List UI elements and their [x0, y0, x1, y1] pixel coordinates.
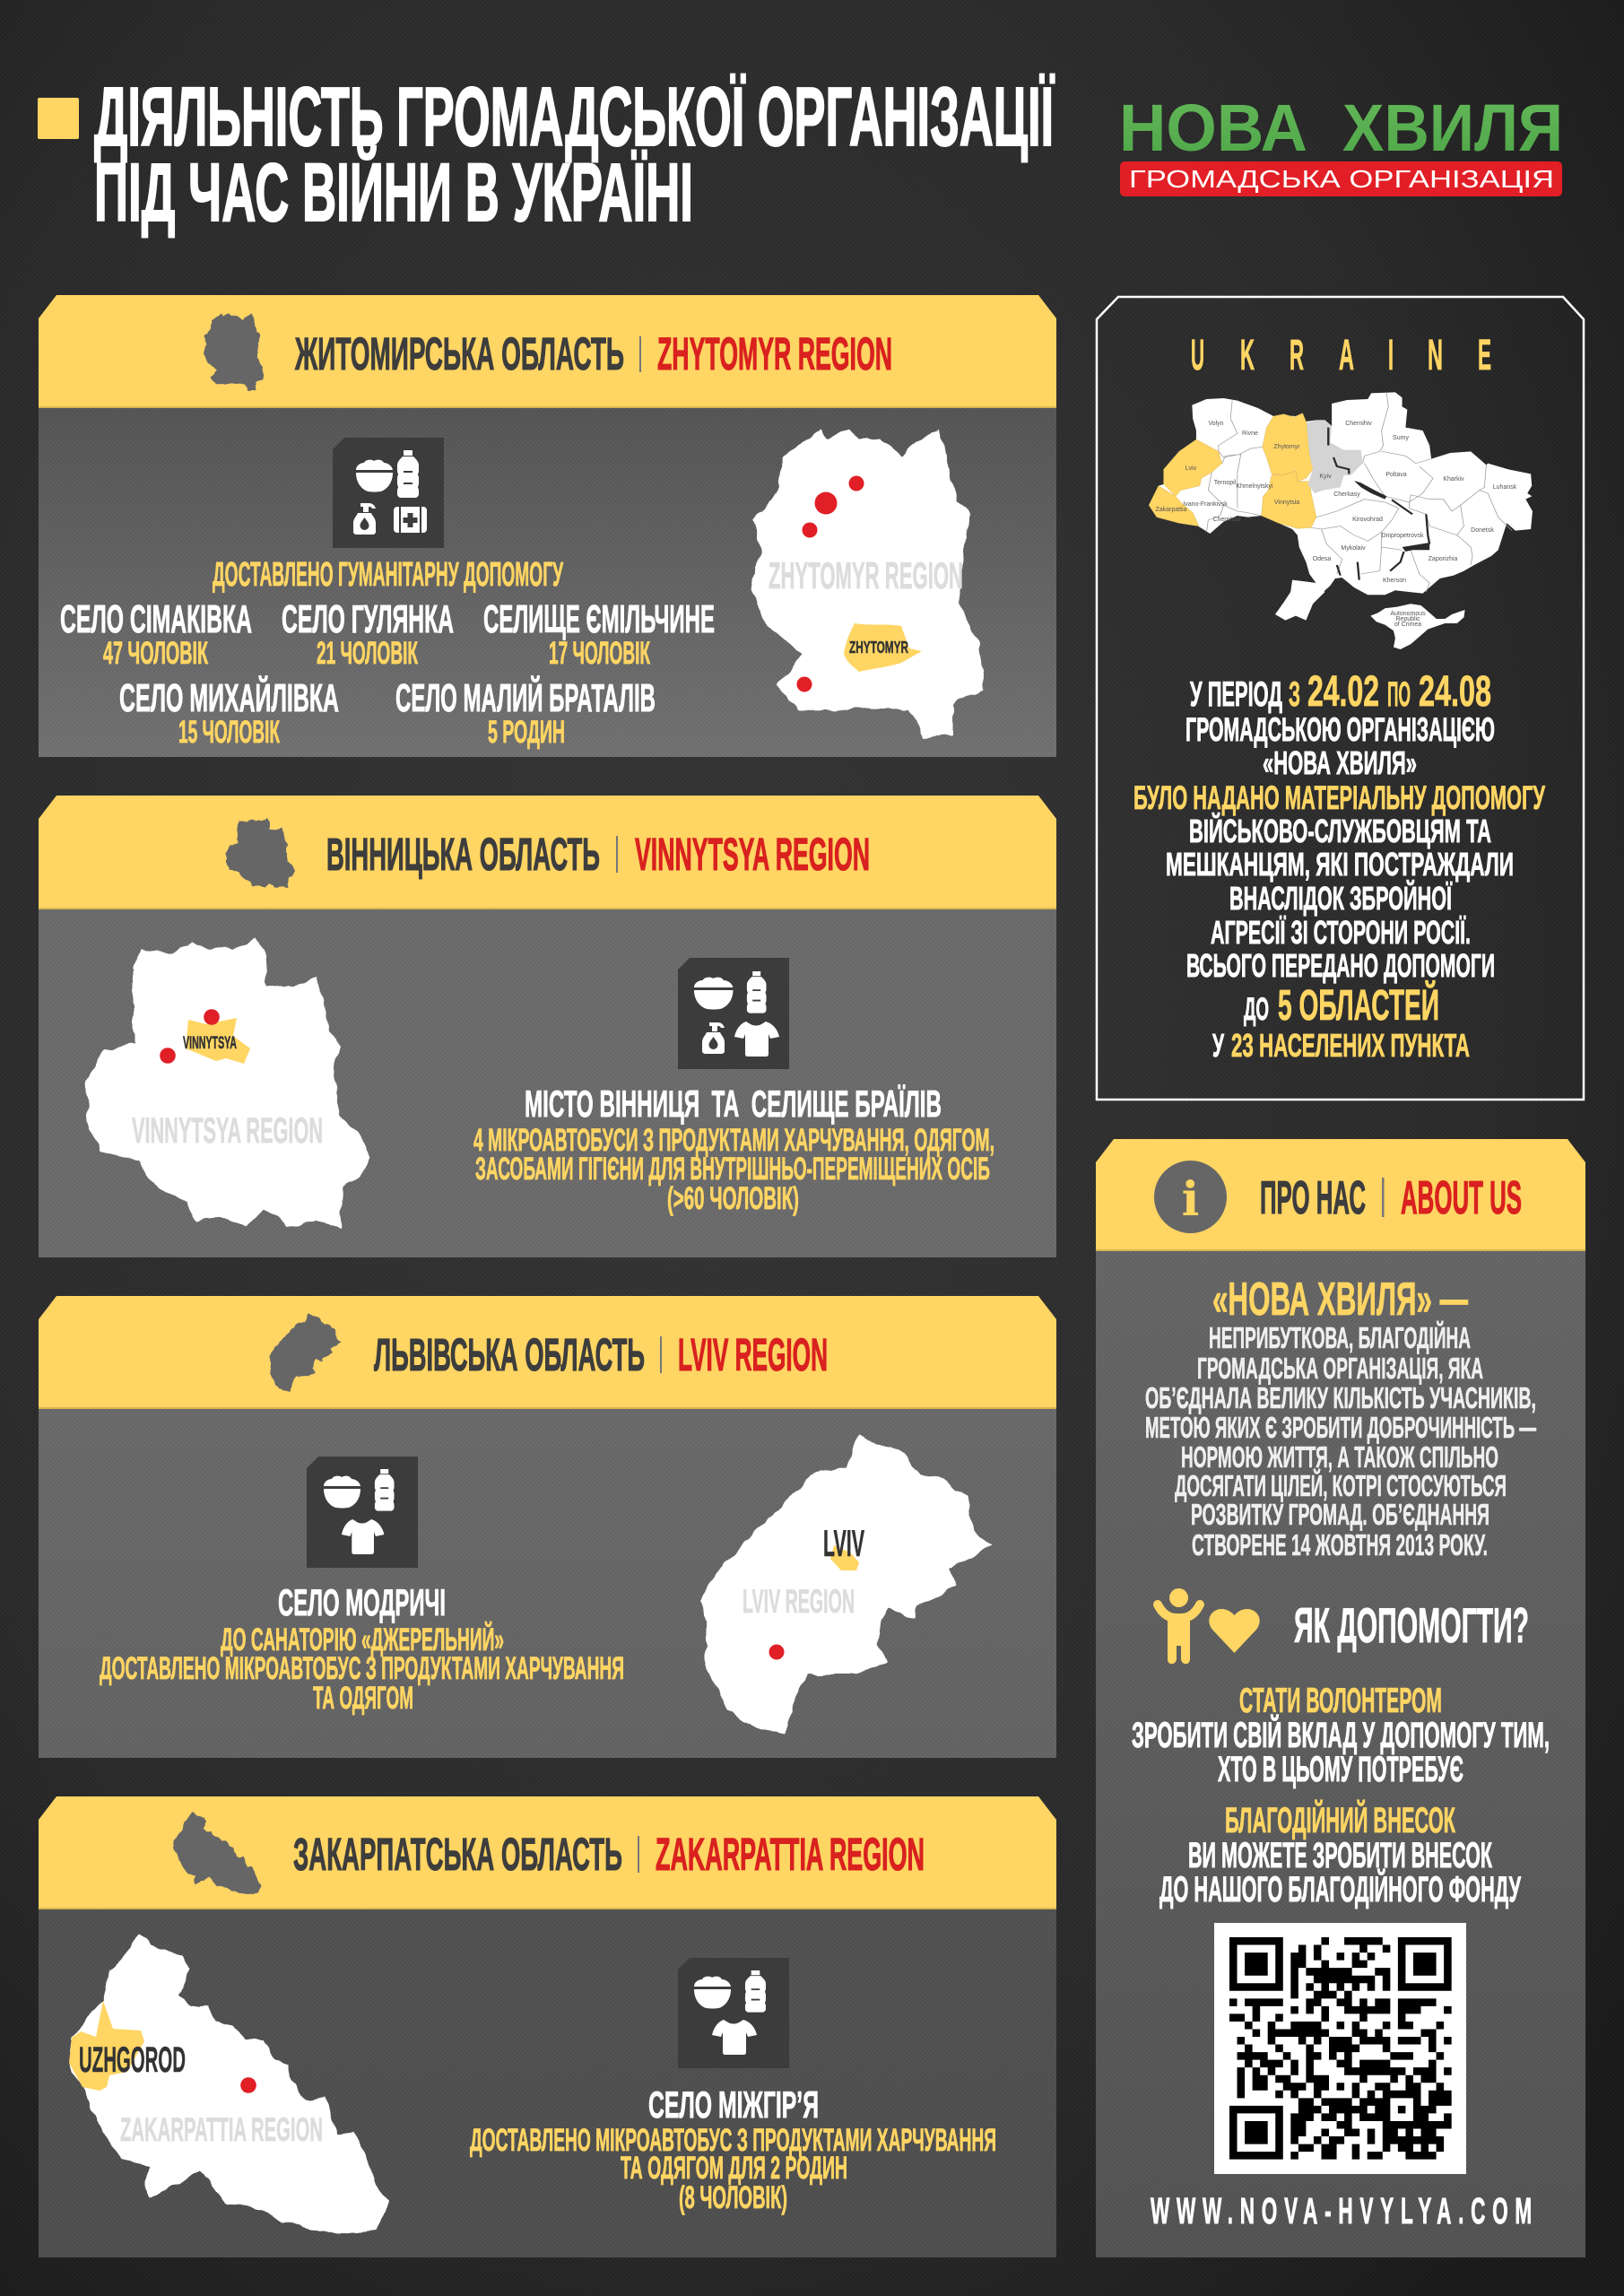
Ukraine summary text: У ПЕРІОД: [1190, 675, 1282, 714]
icon: Vinnytsia oblast silhouette: [226, 818, 295, 888]
panel header: Lviv: LVIV REGION: [678, 1329, 828, 1380]
logo: Нова Хвиля: НОВА: [1119, 91, 1307, 165]
icon: Zakarpattia oblast silhouette: [173, 1812, 261, 1894]
settlements list: СЕЛО МАЛИЙ БРАТАЛІВ: [395, 674, 656, 720]
icon: info: [1154, 1161, 1227, 1233]
map: Zhytomyr region: ZHYTOMYR REGION: [769, 554, 963, 596]
volunteer text: [1132, 1682, 1550, 1789]
panel: Ukraine overview: [1097, 297, 1584, 1100]
QR code: [1214, 1923, 1466, 2174]
map labels: Republic: [1395, 616, 1420, 622]
Lviv text: ДО САНАТОРІЮ «ДЖЕРЕЛЬНИЙ»: [221, 1622, 504, 1657]
title: ПІД ЧАС ВІЙНИ В УКРАЇНІ: [94, 145, 693, 239]
Ukraine summary text: 24.08: [1419, 668, 1491, 716]
map labels: Rivne: [1242, 430, 1258, 437]
map labels: Khmelnytskyi: [1236, 483, 1273, 490]
Vinnytsia text: ЗАСОБАМИ ГІГІЄНИ ДЛЯ ВНУТРІШНЬО-ПЕРЕМІЩЕНИХ ОСІБ: [475, 1152, 990, 1187]
panel: Zhytomyr region: [39, 295, 1056, 757]
Vinnytsia text: (>60 ЧОЛОВІК): [667, 1181, 799, 1216]
Vinnytsia text: [473, 1083, 994, 1216]
map: Vinnytsia region: [86, 937, 370, 1228]
map labels: Cherkasy: [1333, 491, 1360, 498]
aid heading: ДОСТАВЛЕНО ГУМАНІТАРНУ ДОПОМОГУ: [213, 556, 563, 594]
map labels: Lviv: [1185, 465, 1197, 472]
map labels: Mykolaiv: [1341, 545, 1366, 552]
map labels: Chernihiv: [1345, 421, 1372, 427]
map: Lviv region: LVIV REGION: [743, 1583, 855, 1620]
settlements list: 47 ЧОЛОВІК: [103, 636, 208, 671]
Ukraine summary text: «НОВА ХВИЛЯ»: [1263, 744, 1417, 781]
volunteer text: СТАТИ ВОЛОНТЕРОМ: [1239, 1682, 1442, 1720]
heading: UKRAINE: I: [1388, 332, 1394, 379]
Ukraine summary text: ДО: [1244, 992, 1269, 1027]
Ukraine summary text: ВНАСЛІДОК ЗБРОЙНОЇ: [1229, 879, 1453, 917]
logo: Нова Хвиля: ГРОМАДСЬКА ОРГАНІЗАЦІЯ: [1129, 165, 1554, 193]
panel: Vinnytsia region: [39, 796, 1056, 1257]
map labels: Zakarpattia: [1155, 507, 1187, 513]
panel: Lviv region: [39, 1296, 1056, 1758]
title: [38, 70, 1055, 239]
Vinnytsia text: МІСТО ВІННИЦЯ ТА СЕЛИЩЕ БРАЇЛІВ: [525, 1083, 942, 1125]
settlements list: 21 ЧОЛОВІК: [317, 636, 418, 671]
map: Zakarpattia region: UZHGOROD: [79, 2040, 186, 2080]
panel header: Vinnytsia: [39, 796, 1056, 909]
map: Vinnytsia region: VINNYTSYA REGION: [132, 1111, 323, 1151]
Lviv text: СЕЛО МОДРИЧІ: [278, 1581, 446, 1623]
Ukraine summary text: У: [1212, 1027, 1224, 1064]
Ukraine summary text: ПО: [1387, 675, 1411, 714]
Zakarpattia text: ДОСТАВЛЕНО МІКРОАВТОБУС З ПРОДУКТАМИ ХАРЧУВАННЯ: [470, 2123, 996, 2158]
map labels: [1155, 421, 1517, 628]
Zakarpattia text: (8 ЧОЛОВІК): [679, 2180, 787, 2215]
logo: Нова Хвиля: [1119, 91, 1563, 196]
Lviv text: ДОСТАВЛЕНО МІКРОАВТОБУС З ПРОДУКТАМИ ХАРЧУВАННЯ: [100, 1651, 624, 1686]
map labels: Vinnytsia: [1274, 500, 1299, 506]
panel: Zakarpattia region: [39, 1796, 1056, 2257]
map labels: Zhytomyr: [1273, 444, 1300, 450]
map labels: Zaporizhia: [1429, 556, 1457, 562]
heading: UKRAINE: R: [1290, 332, 1304, 379]
Zakarpattia text: СЕЛО МІЖГІР’Я: [648, 2083, 819, 2126]
settlements list: 17 ЧОЛОВІК: [549, 636, 650, 671]
map: Ukraine: [1149, 392, 1533, 649]
icon: person and heart: [1158, 1588, 1260, 1664]
map: Zakarpattia region: ZAKARPATTIA REGION: [120, 2111, 323, 2148]
icon: Lviv oblast silhouette: [269, 1313, 341, 1392]
map labels: of Crimea: [1394, 622, 1421, 628]
settlements list: СЕЛО МИХАЙЛІВКА: [119, 674, 339, 720]
icon: info: i: [1182, 1172, 1199, 1227]
map labels: Autonomous: [1390, 611, 1426, 617]
donation text: [1159, 1799, 1522, 1909]
icon: yellow square: [38, 98, 79, 139]
icon: Zhytomyr oblast silhouette: [204, 313, 264, 391]
Zakarpattia text: [470, 2083, 996, 2215]
panel header: Zhytomyr: ZHYTOMYR REGION: [657, 328, 892, 379]
icon box: food, water, hygiene, clothes: [678, 958, 789, 1069]
panel header: About us: ПРО НАС: [1260, 1172, 1366, 1224]
heading: UKRAINE: [1191, 332, 1491, 379]
panel header: Lviv: ЛЬВІВСЬКА ОБЛАСТЬ: [374, 1329, 645, 1380]
Ukraine summary text: З: [1289, 675, 1300, 714]
map labels: Kherson: [1383, 578, 1406, 584]
map labels: Volyn: [1208, 421, 1224, 427]
settlements list: СЕЛО СІМАКІВКА: [60, 597, 252, 641]
heading: UKRAINE: N: [1428, 332, 1443, 379]
Lviv text: [100, 1581, 624, 1716]
panel header: Zhytomyr: [39, 295, 1056, 408]
logo: Нова Хвиля: ХВИЛЯ: [1342, 91, 1563, 165]
map labels: Ternopil: [1214, 480, 1237, 486]
panel: Ukraine overview: E: [1478, 332, 1491, 379]
icon box: food, water, clothes: [678, 1958, 789, 2068]
map labels: Sumy: [1393, 435, 1409, 441]
panel header: Zakarpattia: ЗАКАРПАТСЬКА ОБЛАСТЬ: [293, 1829, 622, 1880]
website: WWW.NOVA-HVYLYA.COM: [1151, 2191, 1532, 2232]
Ukraine summary text: [1133, 668, 1546, 1064]
Ukraine summary text: 5 ОБЛАСТЕЙ: [1278, 980, 1439, 1030]
map labels: Kharkiv: [1443, 476, 1464, 483]
about text: «НОВА ХВИЛЯ» —: [1212, 1274, 1468, 1326]
Lviv text: ТА ОДЯГОМ: [313, 1681, 413, 1716]
Vinnytsia text: 4 МІКРОАВТОБУСИ З ПРОДУКТАМИ ХАРЧУВАННЯ, ОДЯГОМ,: [473, 1123, 994, 1158]
panel header: Vinnytsia: VINNYTSYA REGION: [635, 829, 870, 880]
map labels: Chernivtsi: [1212, 517, 1241, 523]
panel header: Vinnytsia: ВІННИЦЬКА ОБЛАСТЬ: [326, 829, 600, 880]
map: Zhytomyr region: [751, 428, 984, 738]
map labels: Odesa: [1313, 556, 1331, 562]
heading: UKRAINE: K: [1240, 332, 1255, 379]
map labels: Luhansk: [1493, 484, 1517, 491]
panel: About us: [1096, 1139, 1585, 2257]
panel header: Zhytomyr: ЖИТОМИРСЬКА ОБЛАСТЬ: [294, 328, 624, 379]
settlements list: СЕЛО ГУЛЯНКА: [282, 597, 454, 641]
settlements list: [60, 597, 715, 750]
icon box: food, water, hygiene, first aid: [333, 438, 444, 548]
map labels: Dnipropetrovsk: [1381, 533, 1424, 539]
map: Vinnytsia region: VINNYTSYA: [183, 1034, 237, 1053]
map: Zakarpattia region: [69, 1934, 387, 2234]
panel header: Zakarpattia: [39, 1796, 1056, 1909]
map labels: Ivano-Frankivsk: [1183, 501, 1228, 508]
heading: UKRAINE: A: [1339, 332, 1354, 379]
settlements list: СЕЛИЩЕ ЄМІЛЬЧИНЕ: [483, 597, 715, 641]
map: Lviv region: [699, 1434, 990, 1734]
heading: UKRAINE: U: [1191, 332, 1204, 379]
panel header: About us: [1096, 1139, 1585, 1251]
Ukraine summary text: 23 НАСЕЛЕНИХ ПУНКТА: [1231, 1027, 1470, 1064]
settlements list: 15 ЧОЛОВІК: [178, 715, 280, 750]
Zakarpattia text: ТА ОДЯГОМ ДЛЯ 2 РОДИН: [621, 2151, 847, 2186]
panel header: Lviv: [39, 1296, 1056, 1409]
map labels: Kyiv: [1319, 474, 1332, 480]
map: Lviv region: LVIV: [823, 1522, 864, 1564]
Ukraine summary text: 24.02: [1307, 668, 1379, 716]
map: Zhytomyr region: ZHYTOMYR: [849, 639, 908, 657]
map labels: Kirovohrad: [1352, 517, 1383, 523]
panel header: Zakarpattia: ZAKARPATTIA REGION: [656, 1829, 925, 1880]
map labels: Donetsk: [1471, 527, 1494, 534]
settlements list: 5 РОДИН: [488, 715, 565, 750]
about text: [1145, 1274, 1536, 1561]
icon box: food, water, clothes: [307, 1457, 418, 1568]
map labels: Poltava: [1385, 472, 1407, 478]
